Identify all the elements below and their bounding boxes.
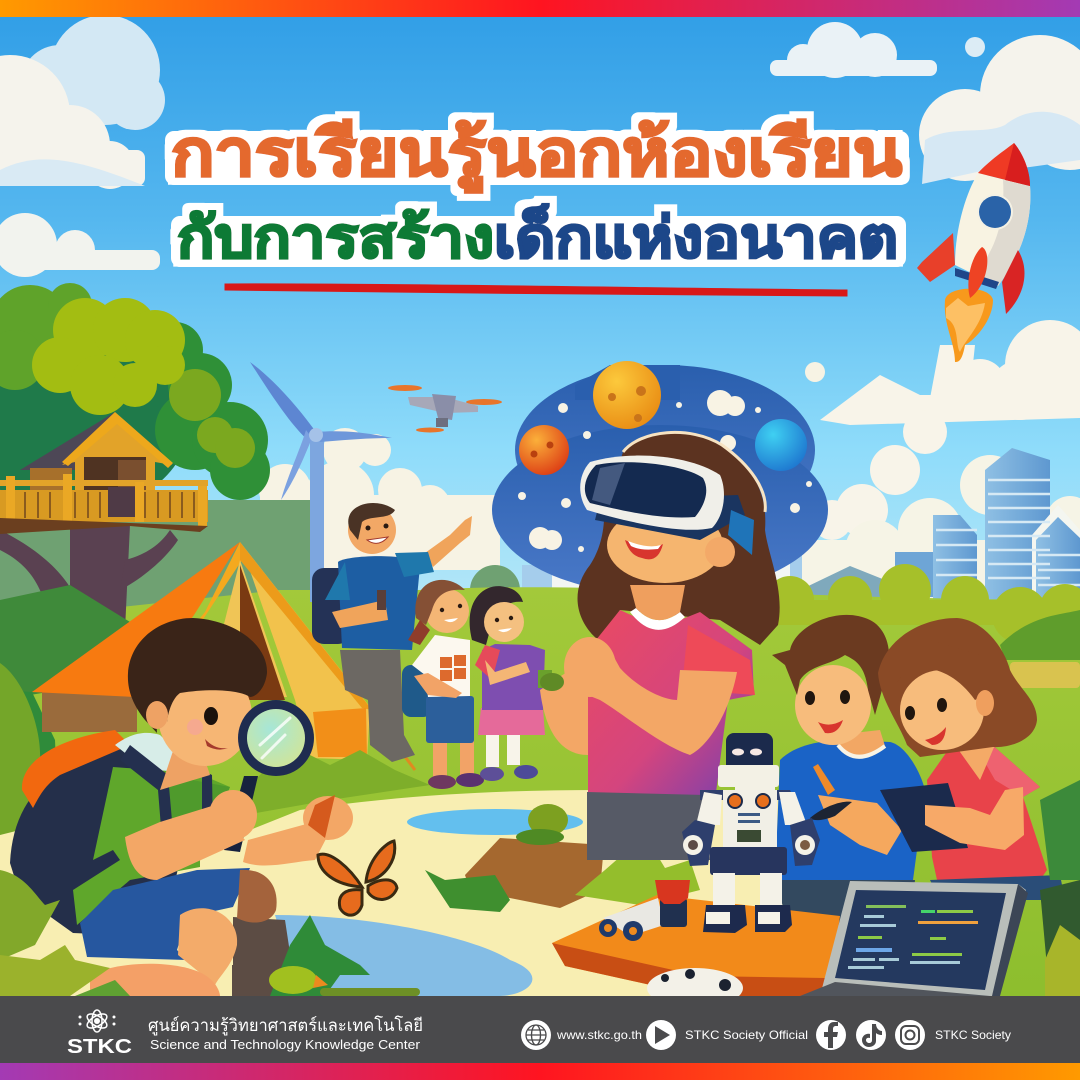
organisation name xyxy=(148,1015,423,1052)
title text: การเรียนรู้นอกห้องเรียน xyxy=(171,117,902,193)
instagram icon and text: STKC Society xyxy=(935,1028,1011,1042)
tree xyxy=(0,283,270,640)
sand patch xyxy=(1010,662,1080,688)
instagram icon and text xyxy=(895,1020,1011,1050)
hedge dark xyxy=(1000,610,1080,660)
background foliage: treeline xyxy=(0,500,520,650)
city buildings xyxy=(800,448,1080,600)
backpack xyxy=(10,745,180,935)
grass strip by adults xyxy=(235,745,430,815)
drone xyxy=(388,385,502,432)
tiktok icon xyxy=(856,1020,886,1050)
shorts xyxy=(80,868,250,960)
arm and hands xyxy=(575,650,737,755)
title text: กับการสร้าง เด็กแห่งอนาคต xyxy=(177,203,898,269)
dog toy xyxy=(647,968,743,1008)
cloud: small xyxy=(965,37,985,57)
neck and face xyxy=(630,585,685,620)
youtube icon and text: STKC Society Official xyxy=(685,1028,808,1042)
top gradient bar xyxy=(0,0,1080,17)
shirt xyxy=(73,767,230,925)
website icon and text xyxy=(521,1020,642,1050)
adult guide xyxy=(312,503,472,762)
logo: STKC atom xyxy=(67,1010,132,1058)
table xyxy=(552,895,840,996)
duck xyxy=(269,966,420,996)
youtube icon and text xyxy=(646,1020,808,1050)
rocket xyxy=(917,143,1030,362)
bottom gradient bar xyxy=(0,1063,1080,1080)
boy with magnifier xyxy=(10,618,353,996)
far buildings behind blob xyxy=(522,545,802,620)
red underline xyxy=(226,285,846,295)
knee front xyxy=(178,908,237,985)
path xyxy=(0,790,800,1000)
knee back xyxy=(237,870,277,923)
laptop xyxy=(800,881,1028,996)
arms xyxy=(125,805,245,880)
cloud bank behind the city xyxy=(790,455,1080,600)
tent xyxy=(32,542,415,770)
title text xyxy=(165,117,909,269)
lawn xyxy=(0,587,1080,1000)
grass tuft by robot xyxy=(575,835,700,905)
left shrubbery xyxy=(0,585,135,860)
cloud: top left xyxy=(0,15,165,189)
child 2 xyxy=(470,586,552,781)
head xyxy=(160,745,210,790)
pants xyxy=(587,792,710,860)
girl with tablet xyxy=(878,618,1065,900)
organisation name: Science and Technology Knowledge Center xyxy=(150,1038,420,1052)
planet: yellow xyxy=(593,361,661,429)
organisation name: ศูนย์ความรู้วิทยาศาสตร์และเทคโนโลยี xyxy=(148,1015,423,1036)
small pond xyxy=(407,809,583,835)
planet: blue xyxy=(755,419,807,471)
VR girl xyxy=(540,432,780,860)
cloud: top centre right xyxy=(770,22,937,78)
headset xyxy=(595,495,745,540)
hedge behind kids xyxy=(766,564,1080,660)
rock by pond xyxy=(232,965,295,996)
cloud: top right xyxy=(919,35,1080,184)
rock under knee xyxy=(233,917,293,973)
lower leg xyxy=(90,964,220,996)
website icon and text: www.stkc.go.th xyxy=(556,1028,642,1042)
left lime bush xyxy=(0,663,48,835)
magnifier xyxy=(224,776,258,852)
facebook icon xyxy=(816,1020,846,1050)
robot xyxy=(682,733,820,933)
wind turbine xyxy=(250,362,392,602)
cloud: right lower with rocket smoke xyxy=(812,320,1080,540)
planet: orange xyxy=(519,425,569,475)
hair back xyxy=(578,432,780,645)
turtle on rock xyxy=(516,804,568,845)
plant by pond xyxy=(270,915,370,996)
shirt xyxy=(588,610,754,800)
logo: STKC atom: STKC xyxy=(67,1036,132,1058)
footer band xyxy=(0,996,1080,1063)
grass tuft by rock xyxy=(425,870,510,912)
cloud: left lower xyxy=(0,213,160,277)
toy car xyxy=(599,880,690,941)
treehouse xyxy=(0,412,208,534)
left arm xyxy=(540,670,590,755)
rock xyxy=(465,838,604,908)
child 1 xyxy=(402,580,484,789)
lower left shrub xyxy=(0,870,130,996)
collar xyxy=(115,733,200,785)
boy coding with stylus xyxy=(772,615,925,930)
distant clouds behind the turbine xyxy=(259,362,825,570)
large pond xyxy=(275,915,532,996)
butterfly xyxy=(318,841,397,915)
VR space dream blob xyxy=(492,361,828,595)
right shrub xyxy=(1040,780,1080,1000)
